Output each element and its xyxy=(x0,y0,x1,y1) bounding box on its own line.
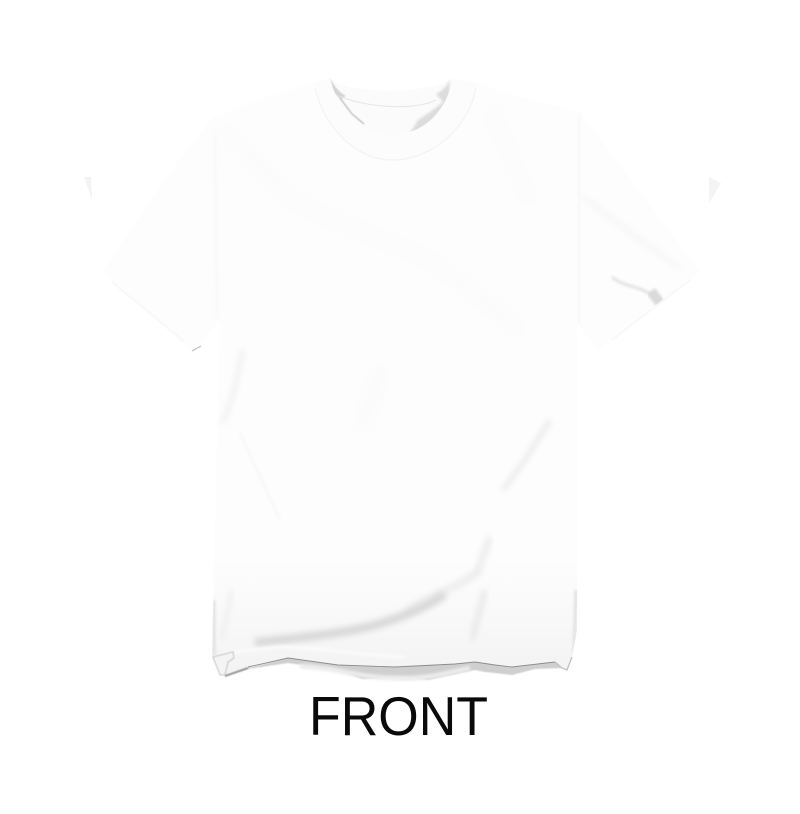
shirt body xyxy=(102,78,700,675)
t-shirt illustration xyxy=(192,78,663,681)
mid-body creases xyxy=(223,350,243,423)
sleeve hems xyxy=(112,280,690,351)
large shadow fold xyxy=(255,594,445,643)
label: FRONT: FRONT xyxy=(309,685,488,747)
shirt lower hem band xyxy=(225,658,562,680)
collar ribbing xyxy=(313,78,478,161)
icon: left stray fold mark xyxy=(84,177,92,200)
bottom hem folds xyxy=(213,652,572,676)
shirt inner back neck xyxy=(330,78,453,135)
fabric shading xyxy=(212,276,663,673)
icon: right stray fold mark xyxy=(709,177,721,203)
